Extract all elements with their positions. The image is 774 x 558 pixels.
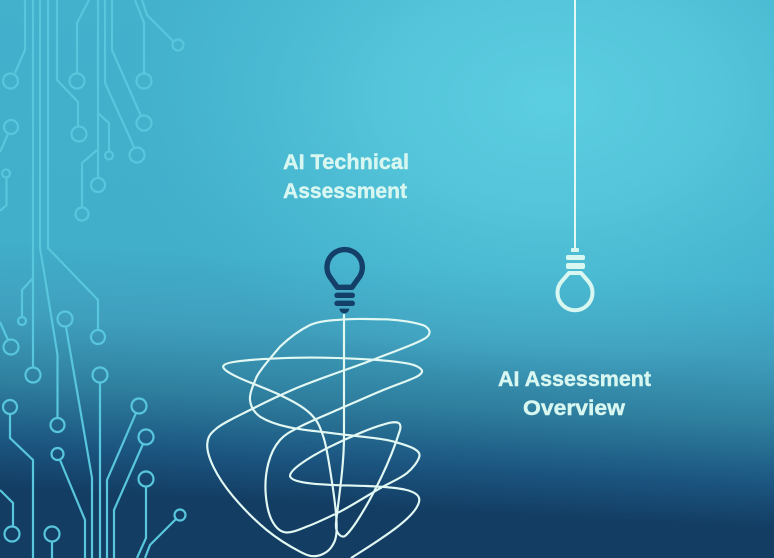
circuit board pattern xyxy=(0,0,186,558)
hanging string xyxy=(574,0,576,249)
heading: AI Technical Assessment: Assessment xyxy=(283,180,407,203)
heading: AI Technical Assessment xyxy=(283,151,409,203)
heading: AI Assessment Overview: AI Assessment xyxy=(498,368,651,391)
heading: AI Assessment Overview xyxy=(498,368,651,420)
icon: dark blue light bulb xyxy=(327,250,362,313)
tangled line scribble xyxy=(207,315,430,558)
heading: AI Assessment Overview: Overview xyxy=(523,397,626,420)
icon: white outline light bulb xyxy=(558,248,592,310)
heading: AI Technical Assessment: AI Technical xyxy=(283,151,409,174)
